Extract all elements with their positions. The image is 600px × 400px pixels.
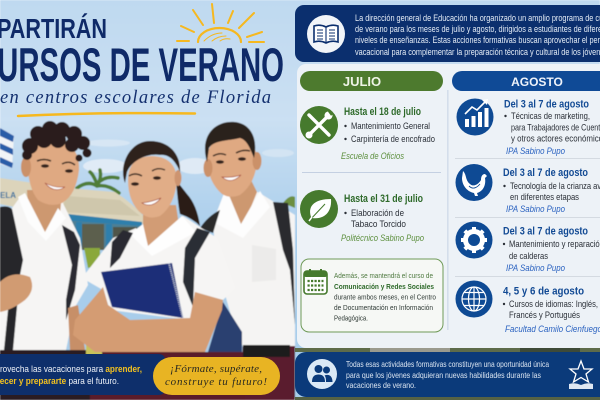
callout: comunicación y redes sociales: Comunicación y Redes Sociales bbox=[334, 282, 434, 291]
icon: growth chart bbox=[456, 98, 494, 136]
course: hasta el 18 de julio: Mantenimiento General bbox=[351, 121, 430, 131]
course: hasta el 18 de julio: Escuela de Oficios bbox=[341, 151, 404, 161]
course: hasta el 18 de julio: Carpintería de encofrado bbox=[351, 134, 435, 144]
course: crianza avícola bbox=[456, 164, 600, 214]
course: calderas bbox=[456, 222, 600, 273]
course: idiomas bbox=[456, 280, 600, 334]
icon: open book bbox=[307, 15, 345, 53]
course: idiomas: Francés y Portugués bbox=[509, 310, 580, 320]
panel: julio bbox=[300, 71, 443, 332]
callout: comunicación y redes sociales: Además, se mantendrá el curso de bbox=[334, 271, 433, 280]
icon: leaf bbox=[300, 190, 338, 228]
callout: comunicación y redes sociales: Pedagógica. bbox=[334, 314, 368, 322]
course: crianza avícola: IPA Sabino Pupo bbox=[506, 204, 565, 214]
course: calderas: de calderas bbox=[509, 251, 548, 261]
heading: julio bbox=[300, 71, 443, 91]
banner: introduction bbox=[295, 5, 600, 62]
course: marketing: IPA Sabino Pupo bbox=[506, 146, 565, 156]
course: hasta el 31 de julio: Tabaco Torcido bbox=[351, 219, 406, 229]
badge: slogan bbox=[153, 357, 280, 395]
underline stroke bbox=[18, 113, 195, 116]
intro text bbox=[355, 13, 600, 57]
icon: star over open book logo bbox=[569, 361, 593, 389]
course: hasta el 31 de julio bbox=[300, 190, 424, 243]
banner: call to action bbox=[0, 354, 165, 395]
course: idiomas: 4, 5 y 6 de agosto bbox=[503, 286, 584, 298]
photo: three students in front of a school: ELA bbox=[0, 191, 16, 200]
course: hasta el 31 de julio: Hasta el 31 de julio bbox=[344, 193, 423, 205]
heading: julio: JULIO bbox=[343, 74, 381, 89]
icon: wrench and screwdriver bbox=[300, 106, 338, 144]
course: crianza avícola: en diferentes etapas bbox=[510, 192, 579, 202]
badge: slogan: construye tu futuro! bbox=[165, 376, 267, 388]
closing text: vacaciones de verano. bbox=[346, 380, 416, 390]
callout: comunicación y redes sociales: de Documentación en Información bbox=[334, 303, 433, 312]
subtitle script: en centros escolares de Florida bbox=[0, 88, 271, 108]
course: calderas: IPA Sabino Pupo bbox=[506, 263, 565, 273]
panel: months background bbox=[297, 64, 600, 348]
icon: hen bbox=[456, 164, 492, 201]
heading: agosto: AGOSTO bbox=[511, 75, 563, 89]
panel: agosto bbox=[452, 71, 600, 334]
course: hasta el 18 de julio bbox=[300, 106, 435, 161]
icon: calendar bbox=[304, 269, 327, 294]
icon: gear bbox=[456, 222, 492, 258]
course: hasta el 18 de julio: Hasta el 18 de julio bbox=[344, 106, 421, 118]
photo strip under the panel bbox=[295, 348, 600, 400]
closing text bbox=[346, 359, 549, 390]
icon: people bbox=[307, 359, 337, 389]
closing text: para que los jóvenes adquieran nuevas habilidades durante las bbox=[346, 370, 541, 380]
course: marketing bbox=[456, 98, 600, 156]
badge: slogan: ¡Fórmate, supérate, bbox=[170, 363, 262, 375]
callout: comunicación y redes sociales: durante ambos meses, en el Centro bbox=[334, 292, 436, 302]
call to action text bbox=[0, 363, 142, 386]
course: hasta el 31 de julio: Politécnico Sabino Pupo bbox=[341, 233, 424, 243]
course: hasta el 31 de julio: Elaboración de bbox=[351, 208, 404, 218]
title block bbox=[0, 13, 284, 108]
icon: sun bbox=[177, 4, 264, 42]
heading: agosto bbox=[452, 71, 600, 91]
banner: closing message bbox=[295, 352, 600, 397]
icon: globe bbox=[456, 280, 492, 318]
callout: comunicación y redes sociales bbox=[301, 259, 443, 332]
